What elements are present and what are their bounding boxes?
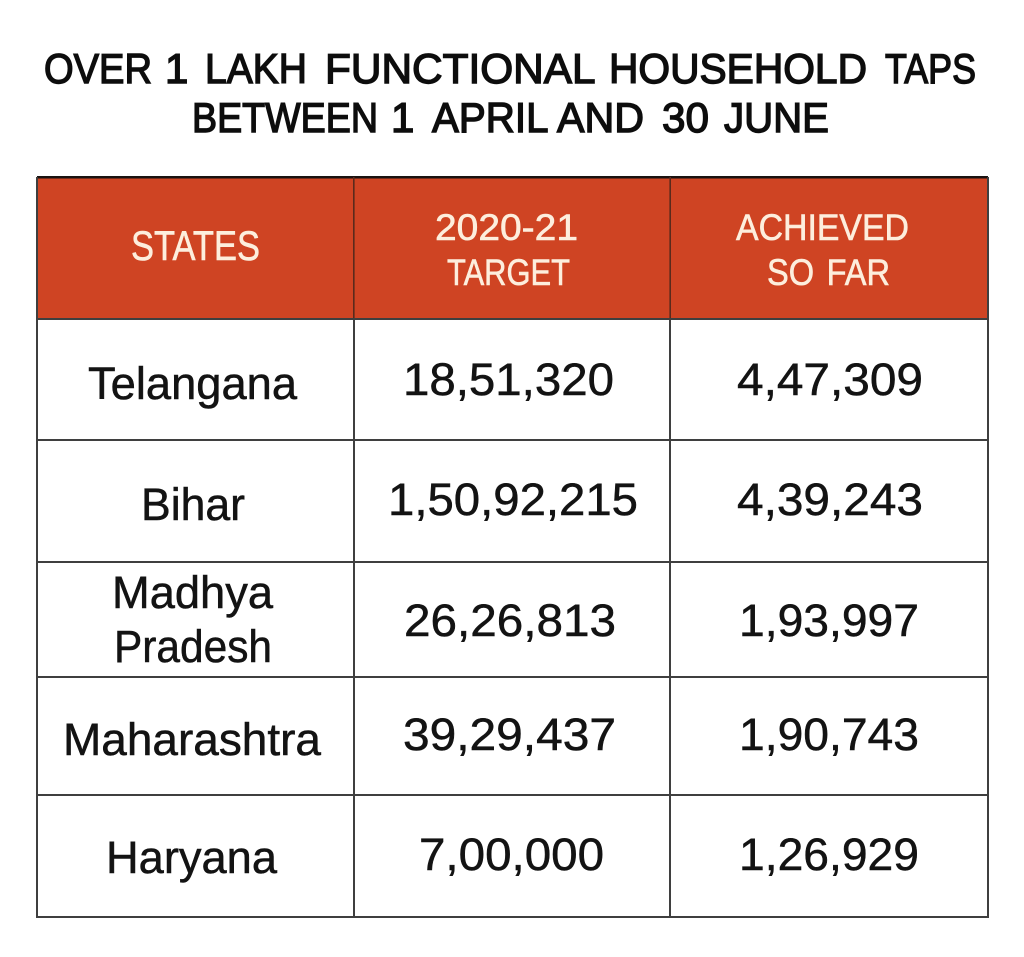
- row: Madhya Pradesh: [112, 567, 919, 672]
- title: OVER: [44, 45, 152, 92]
- row: Bihar: 4,39,243: [737, 474, 923, 525]
- header: 2020-21 target: TARGET: [447, 252, 570, 293]
- header: achieved so far: [736, 207, 909, 293]
- title: BETWEEN: [192, 94, 378, 141]
- title: JUNE: [724, 94, 829, 141]
- title: FUNCTIONAL: [325, 45, 594, 92]
- row: Madhya Pradesh: Madhya: [112, 567, 274, 618]
- title: AND: [557, 94, 644, 141]
- table: [37, 176, 988, 917]
- title: HOUSEHOLD: [609, 45, 867, 92]
- row: Telangana: [88, 354, 923, 409]
- title: TAPS: [885, 45, 976, 92]
- row: Madhya Pradesh: Pradesh: [114, 621, 272, 672]
- row: Telangana: 4,47,309: [737, 354, 923, 405]
- row: Telangana: Telangana: [88, 358, 298, 409]
- row: Haryana: Haryana: [106, 832, 278, 883]
- title: 30: [662, 94, 709, 141]
- row: Telangana: 18,51,320: [403, 354, 614, 405]
- title: LAKH: [205, 45, 307, 92]
- header: 2020-21 target: 2020-21: [435, 207, 578, 248]
- header: achieved so far: ACHIEVED: [736, 207, 909, 248]
- header: states: STATES: [131, 222, 260, 269]
- row: Haryana: 1,26,929: [739, 829, 919, 880]
- row: Bihar: 1,50,92,215: [388, 474, 638, 525]
- row: Bihar: Bihar: [141, 479, 245, 530]
- row: Haryana: 7,00,000: [419, 829, 604, 880]
- title: APRIL: [432, 94, 547, 141]
- title: [44, 45, 976, 141]
- row: Maharashtra: 1,90,743: [739, 709, 919, 760]
- title: 1: [165, 45, 188, 92]
- row: Madhya Pradesh: 26,26,813: [404, 595, 616, 646]
- table header row: [37, 176, 988, 319]
- row: Maharashtra: [63, 709, 919, 765]
- title: 1: [391, 94, 414, 141]
- header: achieved so far: SO FAR: [767, 252, 890, 293]
- row: Haryana: [106, 829, 919, 883]
- row: Maharashtra: Maharashtra: [63, 714, 322, 765]
- row: Madhya Pradesh: 1,93,997: [739, 595, 919, 646]
- row: Maharashtra: 39,29,437: [403, 709, 616, 760]
- row: Bihar: [141, 474, 923, 530]
- header: 2020-21 target: [435, 207, 578, 293]
